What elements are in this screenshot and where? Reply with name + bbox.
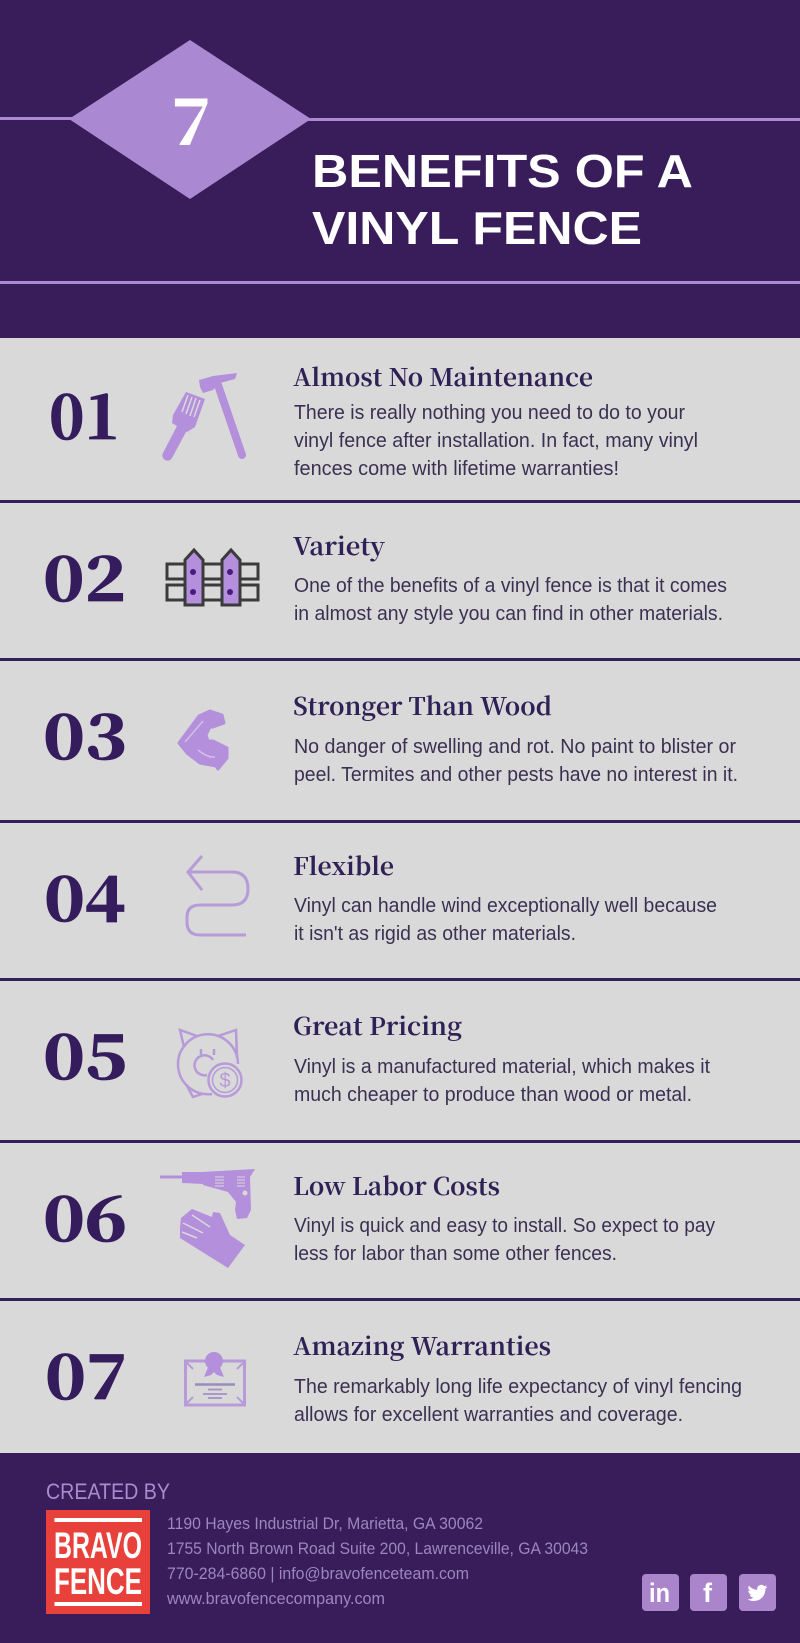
contact details: www.bravofencecompany.com: [166, 1590, 385, 1608]
heading: Low Labor Costs: [293, 1167, 500, 1202]
icon: diamond with number 7: 7: [171, 70, 211, 164]
created by label: CREATED BY: [46, 1479, 170, 1504]
title: BENEFITS OF A: [312, 145, 693, 197]
text block: it isn't as rigid as other materials.: [294, 923, 576, 945]
heading: Amazing Warranties: [293, 1327, 551, 1362]
text block: Vinyl is a manufactured material, which makes it: [294, 1056, 710, 1078]
icon: winding arrow: [187, 856, 248, 935]
logo: Bravo Fence: FENCE: [54, 1561, 142, 1602]
panel: benefit 04: 04: [44, 850, 126, 939]
panel: benefit 05: 05: [43, 1008, 127, 1097]
text block: Vinyl can handle wind exceptionally well because: [294, 895, 717, 917]
icon: linkedin: in: [649, 1578, 670, 1608]
text block: The remarkably long life expectancy of vinyl fencing: [294, 1376, 742, 1398]
text block: [294, 1056, 710, 1106]
text block: No danger of swelling and rot. No paint to blister or: [294, 736, 736, 758]
panel: header: [0, 0, 800, 338]
contact details: 1190 Hayes Industrial Dr, Marietta, GA 30062: [167, 1515, 483, 1533]
panel: benefit 07: [45, 1327, 742, 1426]
text block: much cheaper to produce than wood or metal.: [294, 1084, 692, 1106]
contact details: 770-284-6860 | info@bravofenceteam.com: [167, 1565, 469, 1583]
icon: facebook: f: [703, 1578, 713, 1608]
text block: Vinyl is quick and easy to install. So expect to pay: [294, 1215, 715, 1237]
text block: There is really nothing you need to do to your: [294, 402, 685, 424]
panel: benefit 06: [43, 1167, 715, 1268]
text block: allows for excellent warranties and coverage.: [294, 1404, 683, 1426]
heading: Great Pricing: [293, 1007, 462, 1042]
text block: [294, 1215, 715, 1265]
icon: fence: [167, 550, 258, 605]
panel: benefit 05: [43, 1007, 710, 1106]
text block: [294, 895, 717, 945]
logo: Bravo Fence: BRAVO: [54, 1525, 142, 1566]
icon: twitter: [739, 1574, 776, 1611]
text block: One of the benefits of a vinyl fence is that it comes: [294, 575, 727, 597]
title: VINYL FENCE: [312, 202, 642, 254]
row dividers: [0, 500, 800, 1301]
panel: benefit 04: [44, 847, 717, 945]
text block: [294, 575, 727, 625]
icon: piggy bank with coin: $: [219, 1070, 231, 1092]
text block: peel. Termites and other pests have no interest in it.: [294, 764, 738, 786]
panel: benefit 02: 02: [43, 530, 126, 619]
icon: flexed bicep: [179, 711, 227, 769]
heading: Stronger Than Wood: [293, 687, 552, 722]
title: [312, 145, 693, 254]
heading: Almost No Maintenance: [293, 358, 593, 393]
text block: in almost any style you can find in other materials.: [294, 603, 723, 625]
icon: drill and glove: [160, 1169, 255, 1268]
panel: benefit 07: 07: [45, 1328, 127, 1417]
icon: diamond with number 7: [69, 40, 311, 199]
icon: warranty certificate: [186, 1352, 244, 1405]
contact details: [166, 1515, 588, 1608]
icon: hammer and paint brush: [162, 373, 242, 461]
panel: benefit 02: [43, 527, 727, 625]
panel: benefit 01: [49, 358, 698, 480]
text block: vinyl fence after installation. In fact, many vinyl: [294, 430, 698, 452]
text block: [294, 736, 738, 786]
text block: fences come with lifetime warranties!: [294, 458, 619, 480]
text block: less for labor than some other fences.: [294, 1243, 617, 1265]
panel: benefit 03: 03: [43, 688, 127, 777]
panel: benefit 03: [43, 687, 738, 786]
icon: facebook: [690, 1574, 727, 1611]
heading: Variety: [293, 527, 385, 562]
panel: benefit 06: 06: [43, 1170, 127, 1259]
contact details: 1755 North Brown Road Suite 200, Lawrenceville, GA 30043: [167, 1540, 588, 1558]
icon: piggy bank with coin: [178, 1030, 242, 1097]
panel: footer: [0, 1453, 800, 1643]
text block: [294, 1376, 742, 1426]
panel: benefit 01: 01: [49, 368, 120, 457]
logo: Bravo Fence: [46, 1510, 150, 1614]
icon: linkedin: [642, 1574, 679, 1611]
heading: Flexible: [293, 847, 394, 882]
text block: [294, 402, 698, 480]
panel: benefits background: [0, 338, 800, 1453]
